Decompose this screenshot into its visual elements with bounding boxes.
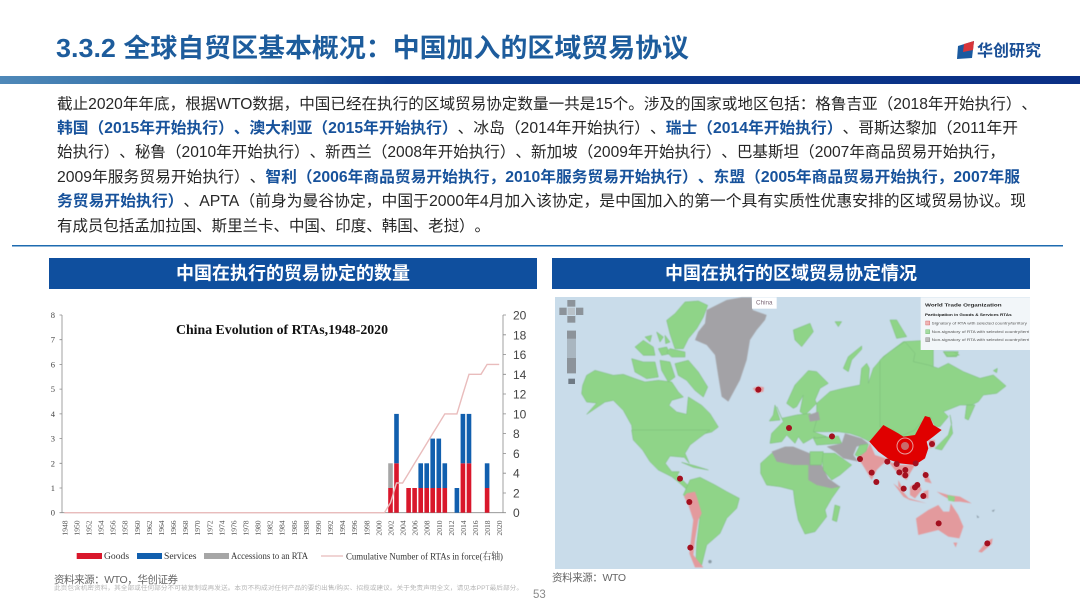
map label: China: China: [756, 300, 773, 307]
year labels: 2000: [374, 520, 383, 536]
goods bars: [388, 463, 489, 513]
Greenland, Africa and Arctic islands: [695, 297, 958, 534]
disclaimer: 此页包含机密资料，其全部或任何部分不可被复制或再发送。本页不构成对任何产品的要约出售/购买、招揽或建议。关于免责声明全文，请见本PPT最后部分。: [54, 584, 523, 592]
China target marker: [897, 438, 913, 454]
year labels: 1976: [229, 520, 238, 536]
header bar: [0, 76, 1080, 84]
year labels: 1972: [205, 520, 214, 536]
map: world RTA participation: [555, 297, 1030, 569]
year labels: 2010: [435, 520, 444, 536]
intro text block: 有成员包括孟加拉国、斯里兰卡、中国、印度、韩国、老挝）。: [57, 217, 490, 235]
right axis labels: 10: [513, 407, 527, 421]
year labels: 2020: [495, 520, 504, 536]
right axis labels: [513, 308, 527, 520]
North America north: [582, 301, 718, 439]
year labels: [60, 520, 504, 536]
panel heading: left: 中国在执行的贸易协定的数量: [176, 262, 410, 284]
accessions bar: [388, 463, 393, 488]
map label: China: [752, 297, 777, 309]
year labels: 1986: [290, 520, 299, 536]
cumulative line: [64, 364, 499, 513]
logo: 华创研究: [957, 41, 1041, 60]
left axis labels: 2: [51, 458, 55, 468]
right axis labels: 18: [513, 328, 527, 342]
right axis labels: 20: [513, 308, 527, 322]
year labels: 2004: [399, 520, 408, 536]
map legend: Participation in Goods & Services RTAs: [925, 313, 1012, 317]
year labels: 1948: [60, 520, 69, 536]
chart legend: Goods: [104, 551, 129, 562]
left axis labels: 0: [51, 508, 55, 518]
chart legend: Cumulative Number of RTAs in force(右轴): [346, 550, 503, 562]
year labels: 1996: [350, 520, 359, 536]
Eurasia and North Africa: [769, 340, 933, 480]
year labels: 2008: [423, 520, 432, 536]
year labels: 1968: [181, 520, 190, 536]
map legend: [921, 297, 1030, 350]
year labels: 1958: [121, 520, 130, 536]
year labels: 1978: [242, 520, 250, 536]
chart legend: Accessions to an RTA: [231, 551, 308, 562]
panel heading: left: [49, 258, 537, 289]
year labels: 1992: [326, 520, 335, 536]
panel heading: right: [552, 258, 1030, 289]
year labels: 1990: [314, 520, 323, 536]
year labels: 1982: [266, 520, 275, 536]
year labels: 1956: [109, 520, 118, 536]
source: right: 资料来源：WTO: [552, 571, 626, 584]
year labels: 1966: [169, 520, 178, 536]
chart legend: Services: [164, 551, 197, 562]
year labels: 1964: [157, 520, 166, 536]
year labels: 2014: [459, 520, 468, 536]
year labels: 1960: [133, 520, 142, 536]
map legend: Non-signatory of RTA with selected country/terri: [932, 330, 1030, 334]
right axis labels: 16: [513, 348, 527, 362]
year labels: 1950: [72, 520, 81, 536]
partner dots: [677, 387, 990, 551]
intro text block: 韩国（2015年开始执行）、澳大利亚（2015年开始执行） 、冰岛（2014年开始执行）、瑞士（2014年开始执行）、哥斯达黎加（2011年开: [57, 118, 1018, 137]
chart: China Evolution of RTAs: [51, 308, 527, 562]
right axis labels: 4: [513, 467, 520, 481]
year labels: 1952: [84, 520, 94, 536]
page number: 53: [533, 589, 546, 601]
left axis labels: 4: [51, 409, 56, 419]
year labels: 1970: [193, 520, 202, 536]
logo: 华创研究: 华创研究: [977, 41, 1041, 60]
intro text block: 截止2020年年底，根据WTO数据，中国已经在执行的区域贸易协定数量一共是15个。涉及的国家或地区包括：格鲁吉亚（2018年开始执行）、: [57, 95, 1037, 113]
intro text block: [57, 95, 1037, 235]
right axis labels: 2: [513, 486, 520, 500]
left axis labels: [51, 310, 56, 518]
year labels: 1984: [278, 520, 287, 536]
source: left: 资料来源：WTO，华创证券: [54, 573, 178, 586]
year labels: 1988: [302, 520, 311, 536]
chart legend: [77, 550, 503, 562]
intro text block: 始执行）、秘鲁（2010年开始执行）、新西兰（2008年开始执行）、新加坡（2009年开始执行）、巴基斯坦（2007年商品贸易开始执行，: [57, 143, 1005, 161]
map legend: World Trade Organization: [925, 303, 1002, 309]
right axis labels: 0: [513, 506, 520, 520]
left axis labels: 6: [51, 359, 55, 369]
intro text block: 2009年服务贸易开始执行）、智利（2006年商品贸易开始执行，2010年服务贸易开始执行）、东盟（2005年商品贸易开始执行，2007年服: [57, 167, 1020, 186]
services bars: [394, 414, 489, 513]
panel heading: right: 中国在执行的区域贸易协定情况: [665, 262, 917, 284]
left axis labels: 7: [51, 335, 55, 345]
left axis labels: 8: [51, 310, 55, 320]
year labels: 2018: [483, 520, 492, 536]
China, red: [869, 416, 942, 465]
right axis labels: 12: [513, 388, 527, 402]
year labels: 1954: [96, 520, 106, 536]
year labels: 1994: [338, 520, 347, 536]
year labels: 1974: [217, 520, 226, 536]
Oceania and SE Asia: [888, 462, 995, 553]
year labels: 2002: [386, 520, 396, 536]
right axis labels: 14: [513, 368, 527, 382]
left axis labels: 1: [51, 483, 55, 493]
chart title: China Evolution of RTAs,1948-2020: [176, 323, 388, 338]
right axis labels: 6: [513, 447, 520, 461]
Americas south: [632, 430, 739, 567]
Far East: [880, 342, 1006, 450]
land masses: [582, 297, 1006, 567]
intro text block: 务贸易开始执行）、APTA（前身为曼谷协定，中国于2000年4月加入该协定，是中国加入的第一个具有实质性优惠安排的区域贸易协议。现: [57, 191, 1026, 210]
year labels: 2016: [471, 520, 480, 536]
year labels: 2012: [447, 520, 456, 536]
left axis labels: 3: [51, 434, 55, 444]
title: 3.3.2 全球自贸区基本概况：中国加入的区域贸易协议: [56, 33, 689, 63]
year labels: 1980: [254, 520, 263, 536]
map legend: Non-signatory of RTA with selected country/terri: [932, 338, 1030, 342]
year labels: 2006: [411, 520, 420, 536]
year labels: 1998: [362, 520, 371, 536]
year labels: 1962: [145, 520, 154, 536]
right axis labels: 8: [513, 427, 520, 441]
left axis labels: 5: [51, 384, 55, 394]
map legend: Signatory of RTA with selected country/territory: [932, 321, 1027, 325]
map navigation controls: [559, 300, 583, 384]
